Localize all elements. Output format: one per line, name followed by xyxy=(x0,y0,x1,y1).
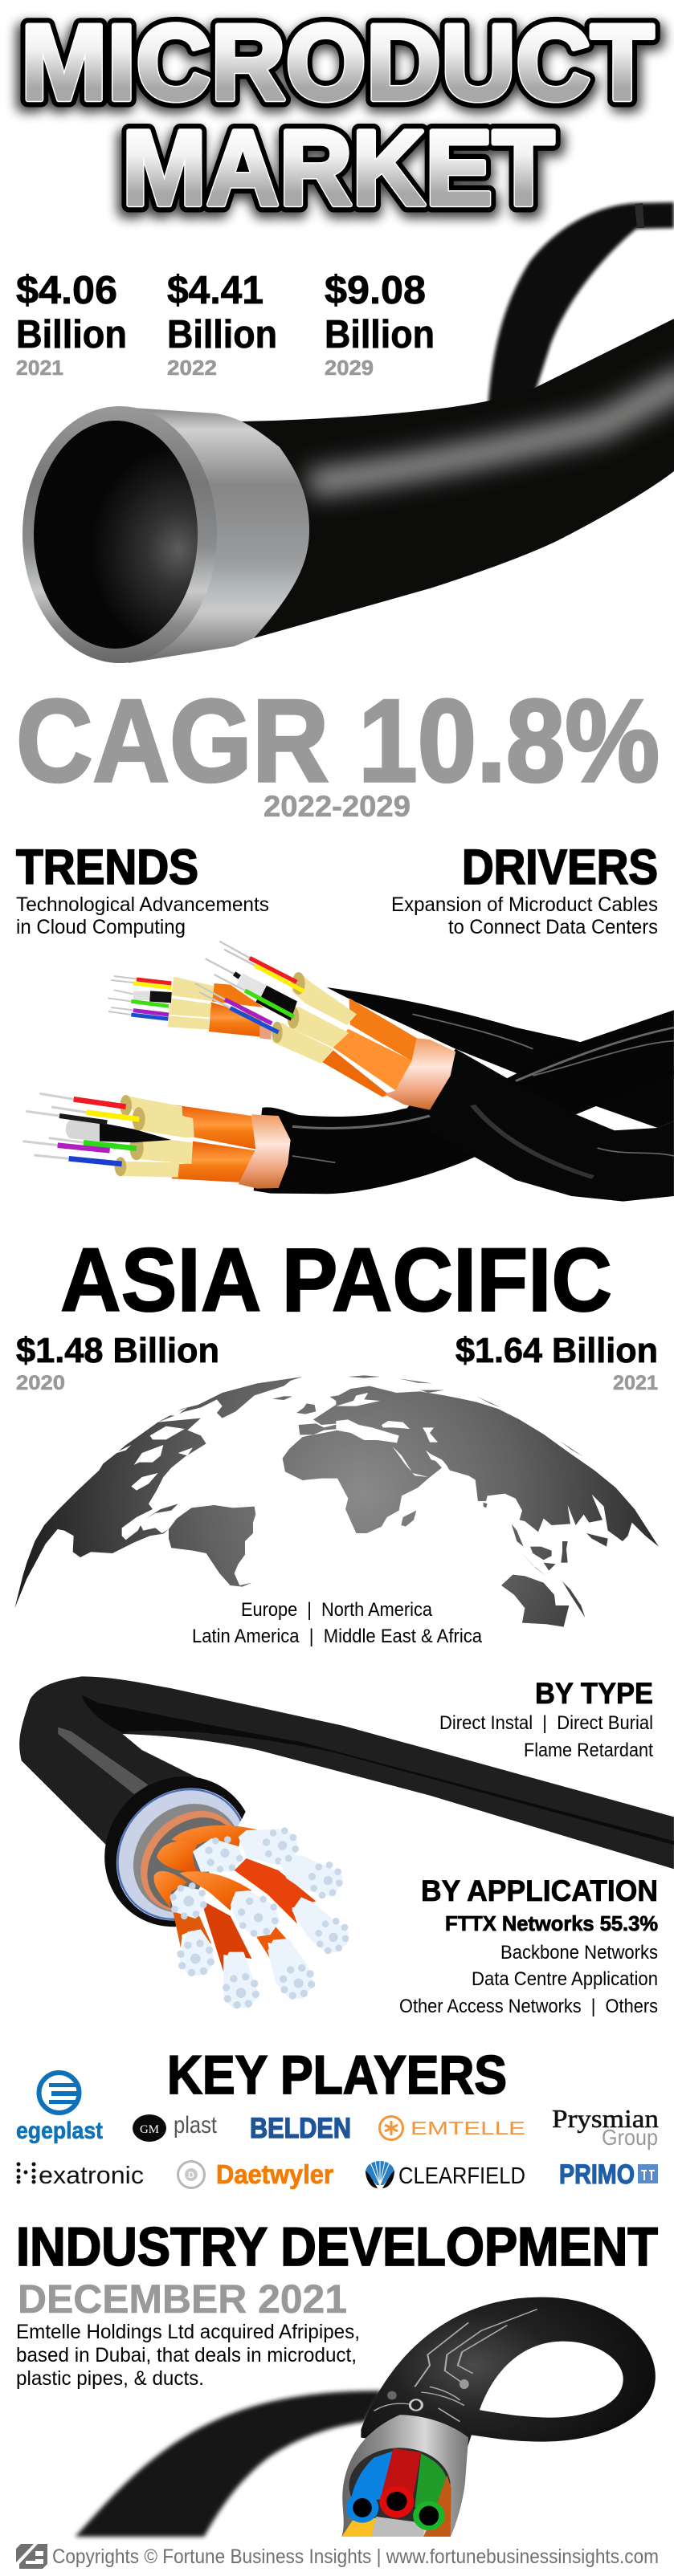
drivers block xyxy=(391,840,658,938)
fibre bundle 3 xyxy=(170,1882,207,1919)
logo: egeplast xyxy=(16,2073,103,2144)
duct loop xyxy=(361,2297,656,2451)
segmentation cable illustration xyxy=(19,1676,674,2008)
regional value 2021: 2021 xyxy=(613,1372,658,1394)
lower bundle core xyxy=(99,1122,171,1142)
logo: GM plast: plast xyxy=(174,2112,218,2139)
logo: GM plast xyxy=(133,2112,218,2142)
drivers block: to Connect Data Centers xyxy=(448,916,658,938)
by application block: FTTX Networks 55.3% xyxy=(445,1911,658,1935)
trends block: Technological Advancements xyxy=(16,893,269,916)
by type block: BY TYPE xyxy=(535,1677,653,1710)
other regions text: Europe | North America xyxy=(241,1599,433,1621)
logo: GM plast: GM xyxy=(140,2123,159,2136)
stat 2022 xyxy=(167,269,277,380)
logo: Clearfield: CLEARFIELD xyxy=(398,2163,525,2189)
left orange section of upper bundle xyxy=(211,983,263,1007)
title: Microduct Market: MICRODUCT xyxy=(21,3,654,123)
trends block: in Cloud Computing xyxy=(16,916,186,938)
regional value 2021 xyxy=(455,1331,658,1394)
map east: eurasia, africa, oceania xyxy=(336,1375,659,1627)
armour layers xyxy=(104,1776,246,1927)
logo: Hexatronic: exatronic xyxy=(39,2161,144,2189)
other regions text xyxy=(192,1599,483,1647)
sleeve interior xyxy=(349,2448,451,2524)
other regions text: Latin America | Middle East & Africa xyxy=(192,1626,483,1647)
logo: Prysmian Group: Prysmian xyxy=(552,2104,659,2133)
yarn end caps xyxy=(272,972,305,1043)
by application block: Data Centre Application xyxy=(472,1968,658,1990)
fibre bundle 2 xyxy=(193,1836,243,1873)
title: Microduct Market xyxy=(17,3,658,234)
title: Microduct Market: MICRODUCT xyxy=(17,8,658,128)
map west: americas, greenland, west europe xyxy=(14,1377,338,1608)
logo: Clearfield xyxy=(366,2160,525,2189)
stat 2022: Billion xyxy=(167,313,277,356)
title: Microduct Market: MARKET xyxy=(118,115,558,234)
title: Microduct Market: MARKET xyxy=(122,109,554,228)
stat 2021: Billion xyxy=(16,313,127,356)
title: Microduct Market: MARKET xyxy=(122,109,554,228)
drivers block: Expansion of Microduct Cables xyxy=(391,893,658,916)
stat 2021: $4.06 xyxy=(16,269,117,312)
Asia Pacific heading: ASIA PACIFIC xyxy=(60,1230,612,1330)
logo: Emtelle xyxy=(379,2116,525,2140)
title: Microduct Market: MICRODUCT xyxy=(21,3,654,123)
logo: egeplast: egeplast xyxy=(16,2118,103,2144)
logo: Prysmian Group: Group xyxy=(602,2125,658,2150)
orange tubes xyxy=(153,1825,316,1972)
development text xyxy=(16,2277,360,2390)
drivers block: DRIVERS xyxy=(462,840,658,894)
logo: Primo: PRIMO xyxy=(559,2159,635,2190)
by type block xyxy=(439,1677,653,1761)
regional value 2020: 2020 xyxy=(16,1372,65,1394)
fibre bundle 5 xyxy=(231,1890,280,1937)
circuit traces xyxy=(374,2309,537,2422)
title: Microduct Market: MARKET xyxy=(122,109,554,228)
hero cable: hoop behind main duct xyxy=(488,202,674,411)
key players heading: KEY PLAYERS xyxy=(167,2045,507,2106)
by application block: Backbone Networks xyxy=(500,1942,658,1964)
by type block: Direct Instal | Direct Burial xyxy=(439,1712,653,1734)
fibre bundle 7 xyxy=(177,1929,214,1976)
stat 2029: 2029 xyxy=(325,356,374,380)
stat 2022: 2022 xyxy=(167,356,217,380)
development text: plastic pipes, & ducts. xyxy=(16,2367,204,2390)
stat 2022: $4.41 xyxy=(167,269,263,312)
by application block: BY APPLICATION xyxy=(421,1874,658,1907)
stat 2029 xyxy=(325,269,435,380)
logo: Daetwyler: Daetwyler xyxy=(216,2159,333,2189)
regional value 2021: $1.64 Billion xyxy=(455,1331,658,1370)
lower bundle jacket, orange and copper xyxy=(175,1105,255,1150)
lower bundle yarn xyxy=(116,1096,194,1178)
by application block xyxy=(399,1874,658,2017)
regional value 2020: $1.48 Billion xyxy=(16,1331,219,1370)
bundle details xyxy=(22,942,357,1189)
company logos xyxy=(16,2073,659,2190)
stat 2029: Billion xyxy=(325,313,435,356)
right yarn section of upper bundle xyxy=(272,973,357,1064)
regional value 2020 xyxy=(16,1331,219,1394)
hero illustration: black duct with metal collar xyxy=(22,319,674,663)
fibre bundle 4 xyxy=(280,1854,343,1898)
centre core xyxy=(255,985,297,1021)
silver sleeve xyxy=(341,2415,468,2537)
black jackets and orange upper bundle xyxy=(254,987,674,1202)
industry development cable illustration xyxy=(76,2297,656,2537)
logo: Prysmian Group xyxy=(552,2104,659,2150)
logo: Emtelle: EMTELLE xyxy=(411,2118,525,2139)
fibre bundle 1 xyxy=(239,1827,299,1865)
fibre bundle 6 xyxy=(292,1897,349,1954)
stat 2029: $9.08 xyxy=(325,269,426,312)
fibre bundle 8 xyxy=(223,1952,259,2008)
rear duct sweep xyxy=(76,2391,382,2537)
lower bundle fibres xyxy=(22,1093,139,1164)
cable jacket xyxy=(19,1676,674,1921)
CAGR figure: 2022-2029 xyxy=(263,790,411,823)
development text: based in Dubai, that deals in microduct, xyxy=(16,2344,357,2366)
coloured microducts xyxy=(341,2448,451,2537)
fibre bundle 9 xyxy=(268,1939,315,2000)
market size stats xyxy=(16,269,435,380)
world map globe xyxy=(14,1375,659,1627)
title: Microduct Market: MICRODUCT xyxy=(21,3,654,123)
development text: DECEMBER 2021 xyxy=(18,2277,347,2322)
by type block: Flame Retardant xyxy=(524,1740,653,1761)
stat 2021 xyxy=(16,269,127,380)
left fibres of upper bundle xyxy=(108,976,171,1019)
trends block: TRENDS xyxy=(16,840,198,894)
development text: Emtelle Holdings Ltd acquired Afripipes, xyxy=(16,2321,360,2343)
logo: Daetwyler: D xyxy=(188,2171,194,2180)
trends block xyxy=(16,840,269,938)
left yarn section of upper bundle xyxy=(168,977,214,1030)
footer logo xyxy=(16,2544,47,2569)
stat 2021: 2021 xyxy=(16,356,63,380)
cable end detail xyxy=(104,1776,349,2008)
logo: Belden: BELDEN xyxy=(250,2113,351,2144)
right fibres of upper bundle xyxy=(195,942,304,1032)
fibre optic cables illustration xyxy=(22,942,674,1202)
